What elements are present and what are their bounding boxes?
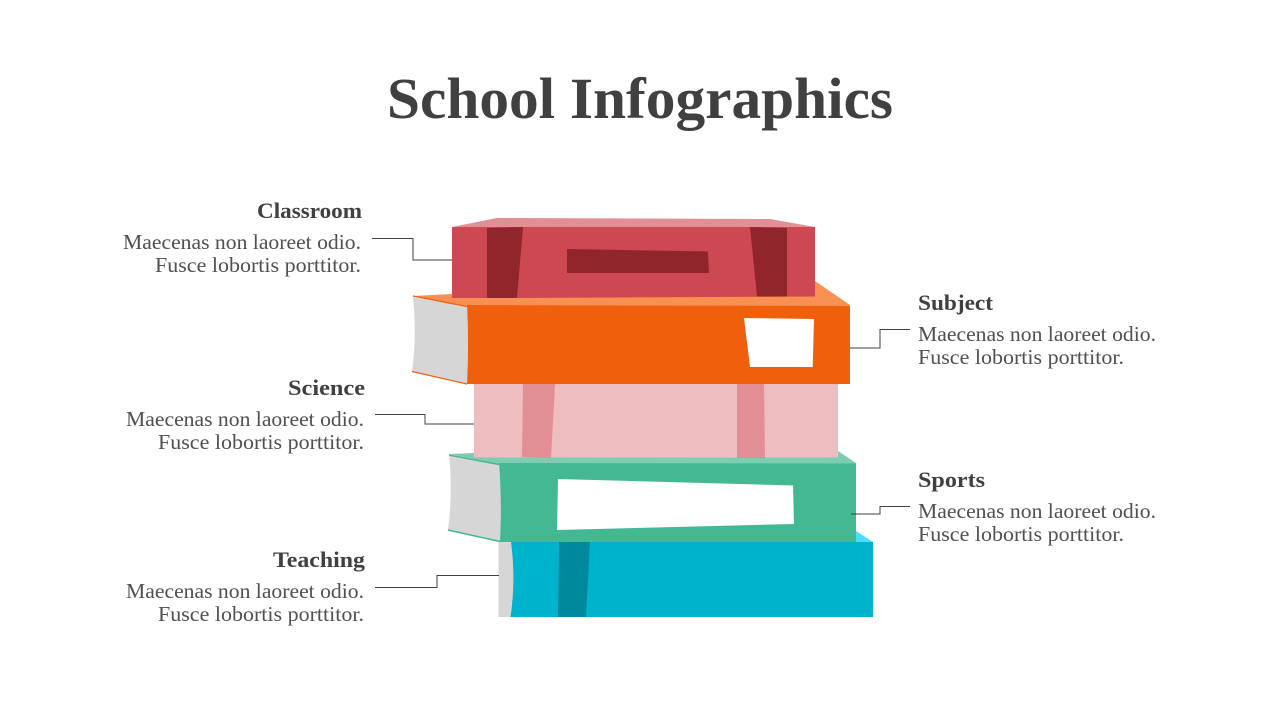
book: orange [412,281,850,384]
callout: Science: Fusce lobortis porttitor. [158,430,364,454]
callout: Sports: Maecenas non laoreet odio. [918,499,1156,523]
callout: Classroom [123,198,452,277]
book: blue (bottom) [498,531,873,617]
callout: Teaching: Teaching [273,547,365,572]
callout: Sports: Fusce lobortis porttitor. [918,522,1124,546]
callout: Classroom: Classroom [257,198,362,223]
callout: Science: Science [288,375,365,400]
callout: Classroom: Fusce lobortis porttitor. [155,253,361,277]
title: School Infographics [387,66,893,131]
callout: Subject: Subject [918,290,994,315]
callout: Sports [851,467,1156,546]
callout: Sports: Sports [918,467,985,492]
callout: Teaching [126,547,499,626]
callout: Science [126,375,474,454]
callout: Teaching: Maecenas non laoreet odio. [126,579,364,603]
book: green [448,451,856,542]
book stack [412,218,873,617]
callout: Classroom: Maecenas non laoreet odio. [123,230,361,254]
callout: Subject [850,290,1156,369]
callout: Subject: Maecenas non laoreet odio. [918,322,1156,346]
callout: Teaching: Fusce lobortis porttitor. [158,602,364,626]
book: pink [474,384,838,458]
book: red (top) [452,218,815,298]
callout: Science: Maecenas non laoreet odio. [126,407,364,431]
callout: Subject: Fusce lobortis porttitor. [918,345,1124,369]
